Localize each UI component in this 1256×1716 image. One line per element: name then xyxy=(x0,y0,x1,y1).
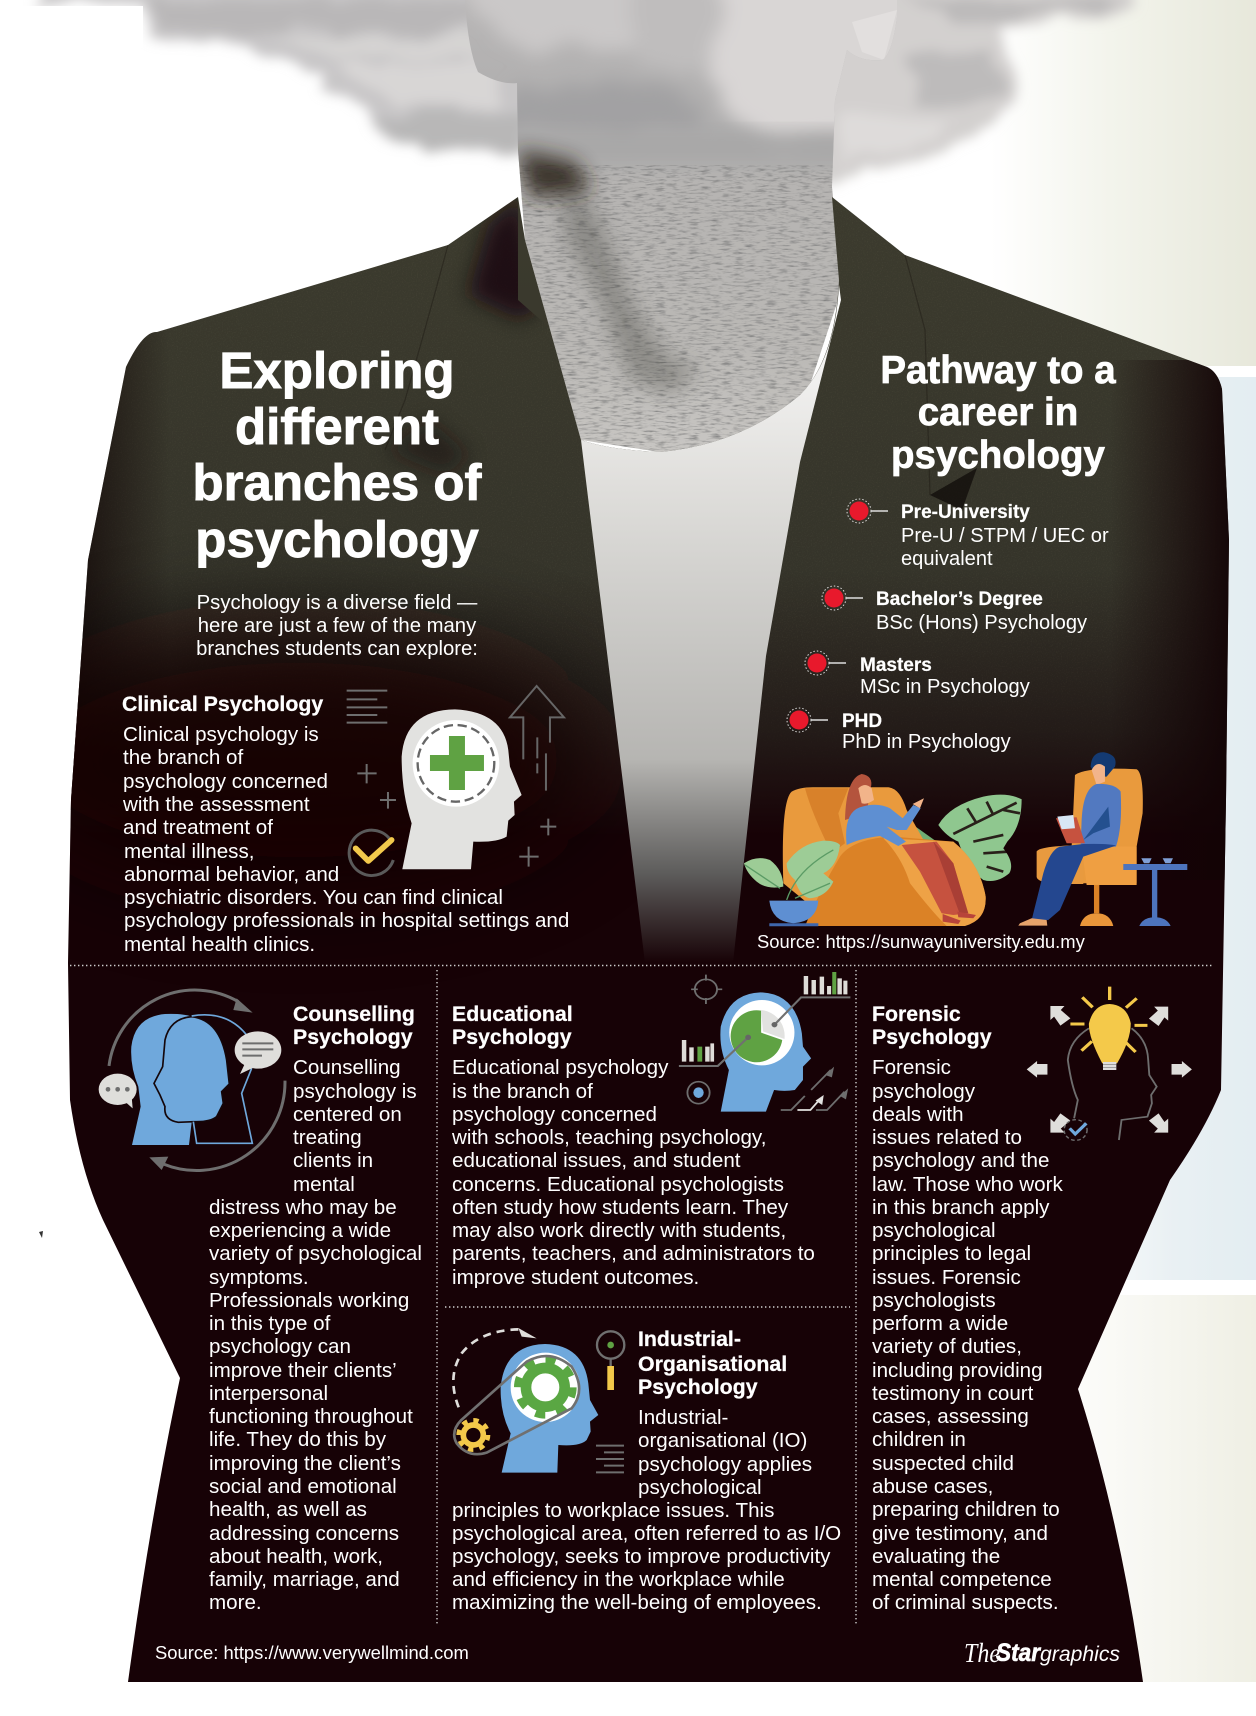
panel: industrial-organisational psychology: Organisational xyxy=(638,1352,787,1376)
panel: counselling psychology: more. xyxy=(209,1591,262,1614)
panel: forensic psychology: give testimony, and xyxy=(872,1522,1048,1545)
panel: industrial-organisational psychology: maximizing the well-being of employees. xyxy=(452,1591,822,1614)
panel: clinical psychology: abnormal behavior, and xyxy=(124,863,339,886)
dividers xyxy=(70,966,1213,1624)
panel: forensic psychology: preparing children to xyxy=(872,1498,1060,1521)
intro text: branches students can explore: xyxy=(196,638,478,660)
panel: counselling psychology: family, marriage, and xyxy=(209,1568,400,1591)
panel: counselling psychology xyxy=(209,1002,422,1614)
panel: forensic psychology: Forensic xyxy=(872,1056,951,1079)
panel: forensic psychology: psychology xyxy=(872,1080,976,1103)
panel: forensic psychology: evaluating the xyxy=(872,1545,1000,1568)
logo: the star graphics: graphics xyxy=(1040,1643,1120,1666)
panel: forensic psychology: law. Those who work xyxy=(872,1173,1063,1196)
panel: clinical psychology: the branch of xyxy=(123,746,243,769)
side table xyxy=(1123,864,1187,926)
photo: neck and head xyxy=(467,0,897,452)
panel: educational psychology: psychology concerned xyxy=(452,1103,657,1126)
panel: forensic psychology: psychological xyxy=(872,1219,996,1242)
panel: educational psychology: parents, teachers, and administrators to xyxy=(452,1242,815,1265)
panel: counselling psychology: experiencing a wide xyxy=(209,1219,391,1242)
panel: industrial-organisational psychology: and efficiency in the workplace while xyxy=(452,1568,785,1591)
logo: the star graphics: Star xyxy=(996,1639,1041,1667)
intro text: Psychology is a diverse field — xyxy=(197,592,478,614)
panel: forensic psychology: mental competence xyxy=(872,1568,1052,1591)
panel: counselling psychology: in this type of xyxy=(209,1312,331,1335)
panel: clinical psychology: mental illness, xyxy=(124,840,254,863)
mask: white corner xyxy=(0,6,143,48)
logo: the star graphics: The xyxy=(964,1638,1000,1668)
panel: educational psychology: is the branch of xyxy=(452,1080,593,1103)
panel: counselling psychology: psychology can xyxy=(209,1335,351,1358)
step: phd: PhD in Psychology xyxy=(842,731,1011,753)
big leaf xyxy=(938,795,1022,881)
panel: forensic psychology: children in xyxy=(872,1428,966,1451)
panel: counselling psychology: variety of psychological xyxy=(209,1242,422,1265)
panel: counselling psychology: Counselling xyxy=(293,1056,401,1079)
logo: the star graphics xyxy=(964,1638,1120,1668)
title: pathway to a career: Pathway to a xyxy=(880,349,1116,392)
title: exploring branches: branches of xyxy=(192,454,483,511)
sofa xyxy=(783,787,937,913)
title: pathway to a career: career in xyxy=(918,391,1078,434)
icon: clinical head with plus xyxy=(347,686,564,876)
panel: forensic psychology: principles to legal xyxy=(872,1242,1031,1265)
step: bachelor's degree xyxy=(822,586,1087,634)
panel: counselling psychology: improving the client’s xyxy=(209,1452,401,1475)
panel: clinical psychology: mental health clinics. xyxy=(124,933,315,956)
step: bachelor's degree: Bachelor’s Degree xyxy=(876,589,1043,610)
panel: forensic psychology: psychologists xyxy=(872,1289,996,1312)
panel: industrial-organisational psychology xyxy=(452,1327,841,1614)
panel: counselling psychology: clients in xyxy=(293,1149,373,1172)
panel: industrial-organisational psychology: Psychology xyxy=(638,1375,758,1399)
panel: counselling psychology: life. They do this by xyxy=(209,1428,387,1451)
panel: counselling psychology: Professionals working xyxy=(209,1289,409,1312)
illustration: therapy session xyxy=(744,752,1187,926)
step: masters: MSc in Psychology xyxy=(860,676,1030,698)
step: pre-university xyxy=(847,499,1109,570)
panel: forensic psychology: of criminal suspects. xyxy=(872,1591,1059,1614)
icon: counselling heads xyxy=(99,990,285,1171)
step: pre-university: equivalent xyxy=(901,548,993,570)
photo: cloud behind head xyxy=(40,0,1130,182)
panel: counselling psychology: about health, work, xyxy=(209,1545,383,1568)
panel: forensic psychology: Forensic xyxy=(872,1002,961,1026)
armchair and therapist xyxy=(1063,769,1143,883)
panel: counselling psychology: mental xyxy=(293,1173,355,1196)
panel: industrial-organisational psychology: psychology applies xyxy=(638,1453,812,1476)
panel: counselling psychology: addressing concerns xyxy=(209,1522,399,1545)
panel: counselling psychology: interpersonal xyxy=(209,1382,328,1405)
panel: educational psychology: improve student outcomes. xyxy=(452,1266,699,1289)
panel: counselling psychology: social and emotional xyxy=(209,1475,397,1498)
panel: educational psychology: Educational xyxy=(452,1002,573,1026)
icon: forensic lightbulb head xyxy=(1027,987,1192,1140)
panel: industrial-organisational psychology: Industrial- xyxy=(638,1327,741,1351)
panel: educational psychology: often study how students learn. They xyxy=(452,1196,789,1219)
panel: clinical psychology: Clinical Psychology xyxy=(122,692,323,716)
intro text xyxy=(196,592,478,660)
panel: forensic psychology: psychology and the xyxy=(872,1149,1049,1172)
panel: forensic psychology: including providing xyxy=(872,1359,1043,1382)
step: phd xyxy=(787,708,1011,753)
step: pre-university: Pre-University xyxy=(901,502,1030,523)
panel: counselling psychology: treating xyxy=(293,1126,362,1149)
panel: industrial-organisational psychology: psychological xyxy=(638,1476,762,1499)
panel: clinical psychology: psychology professionals in hospital settings and xyxy=(124,909,569,932)
panel: industrial-organisational psychology: psychology, seeks to improve productivity xyxy=(452,1545,831,1568)
panel: counselling psychology: Psychology xyxy=(293,1025,413,1049)
icon: educational head with pie chart xyxy=(679,972,850,1112)
step: masters: Masters xyxy=(860,655,932,676)
panel: counselling psychology: symptoms. xyxy=(209,1266,309,1289)
panel: forensic psychology: perform a wide xyxy=(872,1312,1008,1335)
panel: forensic psychology: suspected child xyxy=(872,1452,1014,1475)
panel: forensic psychology: issues. Forensic xyxy=(872,1266,1021,1289)
panel: counselling psychology: psychology is xyxy=(293,1080,417,1103)
panel: forensic psychology: Psychology xyxy=(872,1025,992,1049)
step: phd: PHD xyxy=(842,711,882,732)
panel: educational psychology xyxy=(451,1002,815,1289)
panel: clinical psychology: psychology concerned xyxy=(123,770,328,793)
panel: clinical psychology: and treatment of xyxy=(123,816,273,839)
panel: counselling psychology: functioning throughout xyxy=(209,1405,413,1428)
panel: clinical psychology: psychiatric disorders. You can find clinical xyxy=(124,886,503,909)
panel: forensic psychology: in this branch apply xyxy=(872,1196,1050,1219)
panel: educational psychology: with schools, teaching psychology, xyxy=(451,1126,766,1149)
source: sunway: Source: https://sunwayuniversity.edu.my xyxy=(757,931,1086,952)
panel: educational psychology: Psychology xyxy=(452,1025,572,1049)
panel: counselling psychology: Counselling xyxy=(293,1002,415,1026)
panel: industrial-organisational psychology: Industrial- xyxy=(638,1406,728,1429)
title: exploring branches: psychology xyxy=(195,511,479,568)
title: exploring branches xyxy=(192,342,483,568)
panel: educational psychology: educational issues, and student xyxy=(452,1149,741,1172)
step: pre-university: Pre-U / STPM / UEC or xyxy=(901,525,1109,547)
panel: clinical psychology: with the assessment xyxy=(122,793,310,816)
panel: forensic psychology: variety of duties, xyxy=(872,1335,1022,1358)
panel: forensic psychology xyxy=(872,1002,1063,1614)
icon: industrial head with gears xyxy=(453,1328,624,1473)
panel: educational psychology: concerns. Educational psychologists xyxy=(452,1173,784,1196)
panel: educational psychology: Educational psychology xyxy=(452,1056,669,1079)
small plant xyxy=(744,841,840,898)
stray print mark xyxy=(39,1231,43,1238)
step: bachelor's degree: BSc (Hons) Psychology xyxy=(876,612,1087,634)
panel: forensic psychology: cases, assessing xyxy=(872,1405,1029,1428)
panel: forensic psychology: issues related to xyxy=(872,1126,1022,1149)
title: exploring branches: different xyxy=(235,398,439,455)
title: pathway to a career xyxy=(880,349,1116,477)
panel: industrial-organisational psychology: psychological area, often referred to as I/O xyxy=(452,1522,841,1545)
panel: industrial-organisational psychology: principles to workplace issues. This xyxy=(452,1499,774,1522)
panel: counselling psychology: health, as well as xyxy=(209,1498,367,1521)
panel: forensic psychology: deals with xyxy=(872,1103,964,1126)
intro text: here are just a few of the many xyxy=(198,615,477,637)
panel: forensic psychology: abuse cases, xyxy=(872,1475,993,1498)
title: exploring branches: Exploring xyxy=(219,342,455,399)
panel: counselling psychology: distress who may be xyxy=(209,1196,397,1219)
woman xyxy=(845,774,871,820)
title: pathway to a career: psychology xyxy=(891,434,1106,477)
panel: counselling psychology: centered on xyxy=(293,1103,402,1126)
panel: counselling psychology: improve their clients’ xyxy=(209,1359,397,1382)
panel: forensic psychology: testimony in court xyxy=(872,1382,1034,1405)
panel: clinical psychology: Clinical psychology is xyxy=(123,723,319,746)
panel: pathway steps xyxy=(787,499,1109,753)
source: verywellmind: Source: https://www.verywellmind.com xyxy=(155,1642,469,1663)
panel: clinical psychology xyxy=(122,692,569,956)
panel: industrial-organisational psychology: organisational (IO) xyxy=(638,1429,807,1452)
panel: educational psychology: may also work directly with students, xyxy=(452,1219,786,1242)
step: masters xyxy=(805,651,1030,698)
